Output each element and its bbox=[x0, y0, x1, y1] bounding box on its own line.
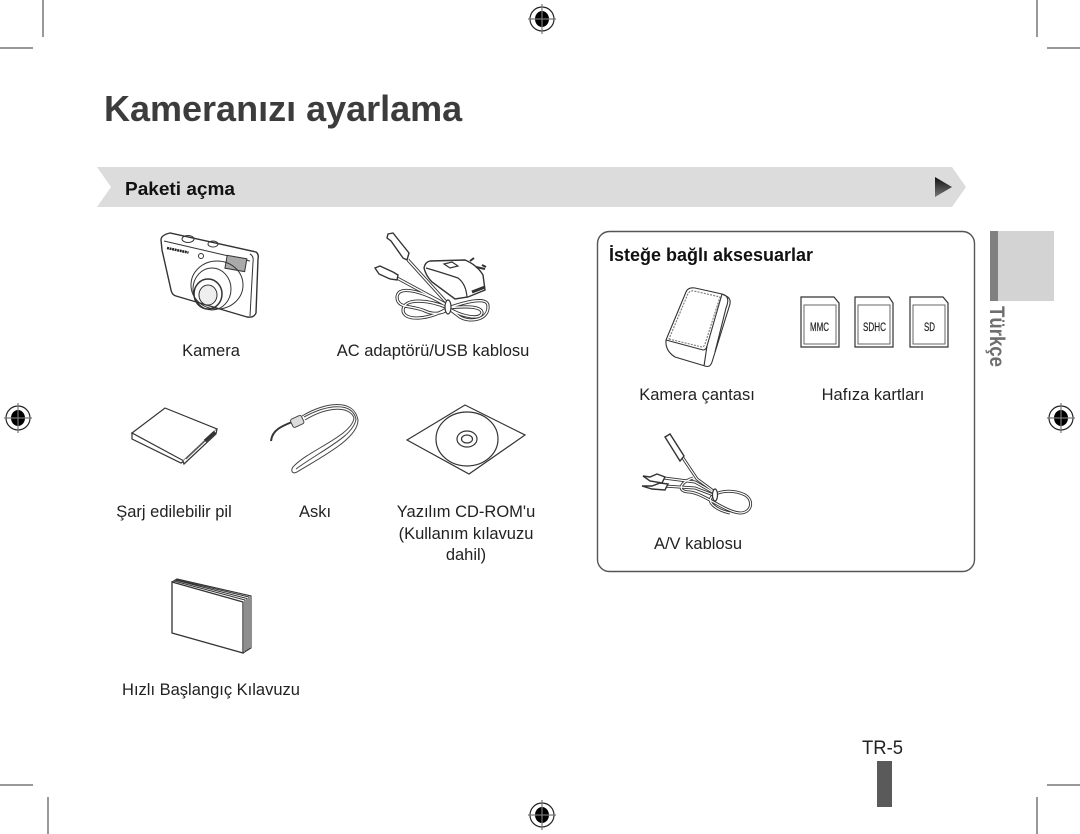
label: battery: Şarj edilebilir pil bbox=[116, 503, 232, 521]
label: camera case: Kamera çantası bbox=[639, 386, 755, 404]
icon: camera bbox=[161, 233, 258, 317]
icon: A/V cable bbox=[642, 434, 751, 513]
icon: SDHC card: SDHC bbox=[863, 322, 886, 334]
label: AC adapter: AC adaptörü/USB kablosu bbox=[337, 342, 529, 360]
label: CD-ROM: dahil) bbox=[446, 546, 486, 564]
heading: Paketi açma: Paketi açma bbox=[125, 178, 236, 199]
icon: SD card: SD bbox=[924, 322, 935, 334]
label: Kamera: Kamera bbox=[182, 342, 241, 360]
icon: SD card bbox=[910, 297, 948, 347]
icon: AC adapter and USB cable bbox=[375, 233, 488, 320]
title: Kameranızı ayarlama bbox=[104, 88, 463, 129]
label: strap: Askı bbox=[299, 503, 331, 521]
icon: quick start guide booklet bbox=[172, 579, 251, 653]
label: CD-ROM: (Kullanım kılavuzu bbox=[399, 525, 533, 543]
icon: registration mark top bbox=[528, 4, 556, 34]
icon: registration mark bottom bbox=[528, 800, 556, 830]
icon: registration mark left bbox=[4, 403, 32, 433]
page marker block bbox=[877, 761, 892, 807]
section banner: Paketi açma bbox=[97, 167, 966, 207]
icon: registration mark right bbox=[1047, 403, 1075, 433]
page number: TR-5 bbox=[862, 738, 903, 759]
icon: camera case bbox=[666, 288, 730, 366]
icon: wrist strap bbox=[271, 404, 358, 473]
icon: MMC card: MMC bbox=[810, 322, 829, 334]
label: CD-ROM: Yazılım CD-ROM'u bbox=[397, 503, 535, 521]
panel: optional accessories bbox=[598, 232, 974, 572]
label: Türkçe: Türkçe bbox=[985, 306, 1008, 367]
heading: optional accessories: İsteğe bağlı aksesuarlar bbox=[609, 245, 813, 265]
label: A/V cable: A/V kablosu bbox=[654, 535, 742, 553]
icon: rechargeable battery bbox=[132, 408, 217, 464]
icon: next arrow bbox=[935, 177, 952, 197]
label: memory cards: Hafıza kartları bbox=[822, 386, 924, 404]
icon: MMC card bbox=[801, 297, 839, 347]
label: quick start guide: Hızlı Başlangıç Kılavuzu bbox=[122, 681, 300, 699]
language tab bbox=[985, 231, 1054, 367]
icon: SDHC card bbox=[855, 297, 893, 347]
icon: CD-ROM bbox=[407, 405, 525, 474]
